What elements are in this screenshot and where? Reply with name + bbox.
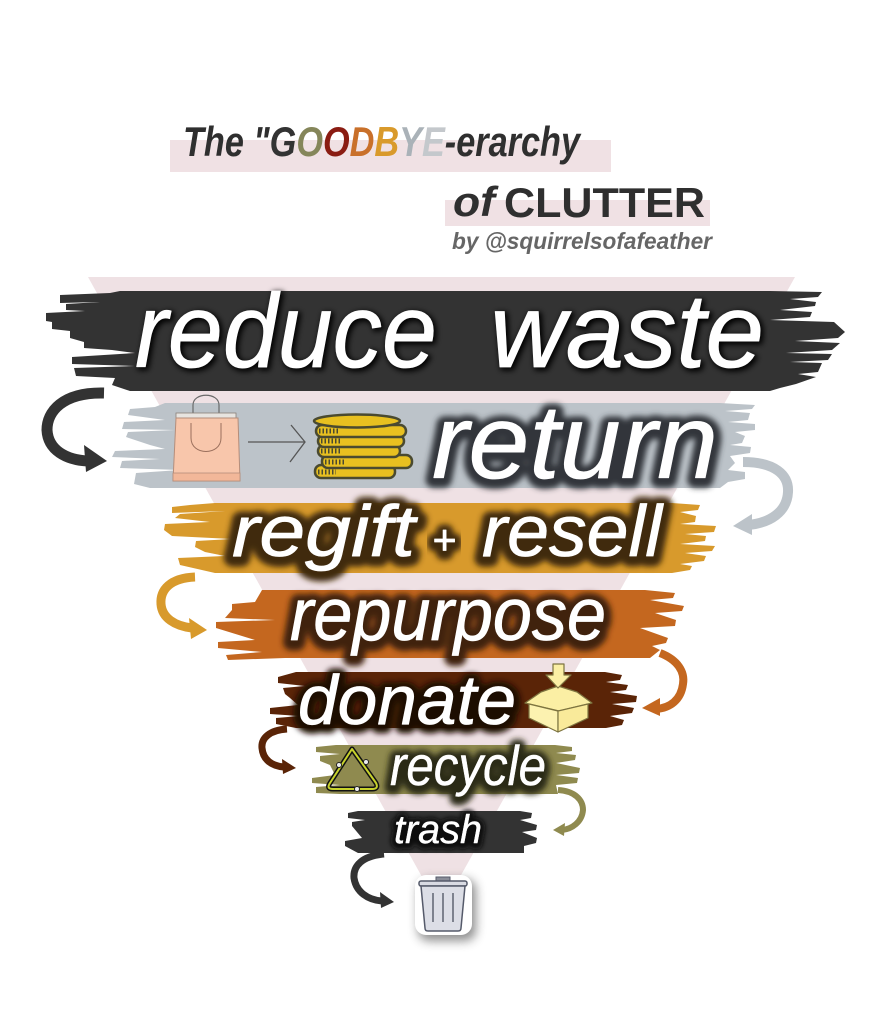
text: donate: donate [298, 661, 516, 739]
text: reduce waste: waste [490, 273, 764, 390]
title block [170, 118, 713, 254]
icon: coin stack [314, 414, 412, 478]
text: repurpose: repurpose [290, 575, 606, 658]
text: recycle: recycle [390, 736, 546, 799]
text: reduce waste: waste [492, 275, 766, 392]
icon: recycle triangle [329, 749, 377, 792]
text: regift + resell: resell [482, 492, 664, 572]
arrow: bag to coins [248, 425, 305, 462]
brush band: return [112, 403, 755, 488]
text: regift + resell: + [432, 518, 456, 565]
text: trash: trash [394, 808, 482, 852]
brush band: regift + resell [164, 503, 716, 573]
text: regift + resell: regift [232, 494, 418, 574]
arrow: repurpose to donate [642, 653, 683, 716]
text: reduce waste: reduce [137, 275, 439, 392]
text: regift + resell: regift [232, 492, 418, 572]
text: recycle: recycle [390, 734, 546, 797]
arrow: donate to recycle [262, 729, 296, 774]
brush band: reduce waste [46, 291, 845, 391]
brush band: recycle [312, 745, 580, 794]
text: reduce waste: reduce [135, 273, 437, 390]
title highlight: line two [445, 200, 710, 226]
brush band: repurpose [216, 590, 684, 660]
text: donate: donate [298, 663, 516, 741]
arrow: recycle to trash [553, 790, 583, 836]
text: return: return [432, 386, 718, 503]
title line one: The "GOODBYE-erarchy [183, 118, 582, 165]
brush band: trash [345, 811, 537, 853]
icon: trash can [415, 875, 476, 941]
text: reduce waste [135, 273, 766, 392]
title highlight: line one [170, 140, 611, 172]
text: regift + resell: + [432, 516, 456, 563]
icon: shopping bag [173, 395, 240, 481]
arrow: regift to repurpose [161, 577, 207, 639]
arrow: return to regift [733, 462, 788, 535]
byline: by @squirrelsofafeather [452, 228, 713, 254]
pink inverted triangle background [88, 277, 795, 911]
title word: CLUTTER: CLUTTER [504, 179, 705, 226]
icon: donation box [525, 664, 592, 732]
title word: of: of [453, 178, 499, 225]
text: return: return [432, 384, 718, 501]
text: regift + resell: resell [482, 494, 664, 574]
arrow: trash to bin [354, 854, 394, 908]
brush band: donate [270, 672, 637, 728]
text: trash: trash [394, 809, 482, 853]
text: regift + resell [232, 492, 664, 574]
arrow: reduce to return [47, 393, 107, 472]
text: repurpose: repurpose [290, 573, 606, 656]
